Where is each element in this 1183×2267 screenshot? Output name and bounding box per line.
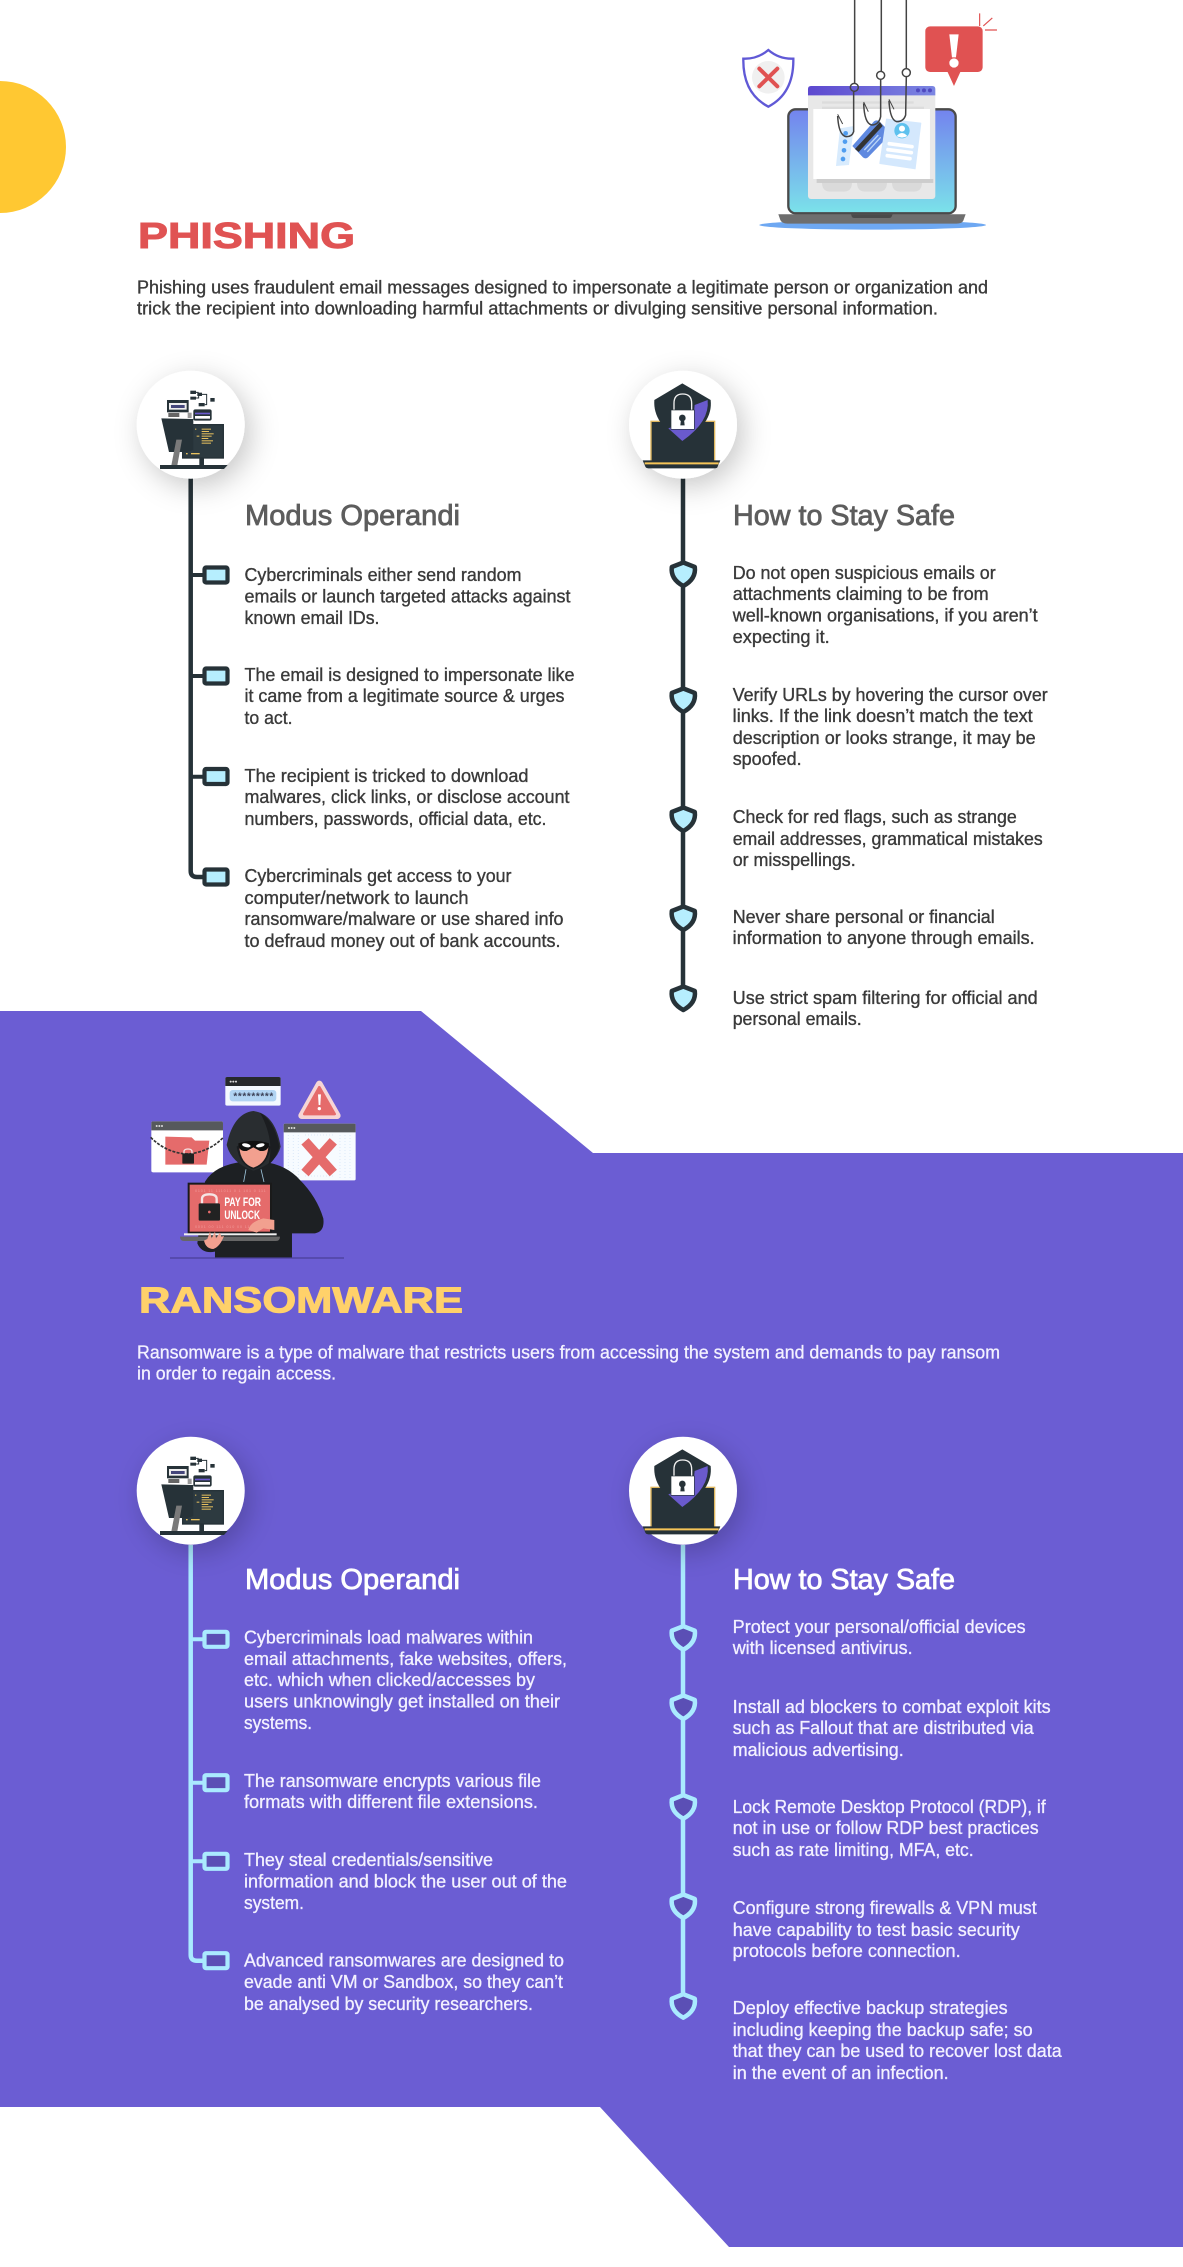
tips: including keeping the backup safe; so <box>733 2020 1033 2040</box>
tips: in the event of an infection. <box>733 2063 949 2083</box>
tips: Configure strong firewalls & VPN must <box>733 1898 1037 1918</box>
tips <box>732 1617 1063 2083</box>
tips: with licensed antivirus. <box>732 1638 913 1658</box>
icon: alert bubble <box>925 13 997 86</box>
phishing description <box>137 278 988 318</box>
tips: that they can be used to recover lost data <box>733 2041 1063 2061</box>
icon circle: shield and laptop <box>629 1437 737 1545</box>
panel: ransomware modus operandi <box>137 1437 567 2014</box>
heading: Modus Operandi <box>245 500 460 532</box>
panel: ransomware how to stay safe <box>629 1437 1063 2083</box>
tips: Protect your personal/official devices <box>733 1617 1026 1637</box>
panel: phishing how to stay safe <box>629 371 1048 1029</box>
laptop with ransom screen <box>180 1183 280 1249</box>
phishing description: Phishing uses fraudulent email messages designed to impersonate a legitimate person or organization and <box>137 278 988 298</box>
title: phishing: PHISHING <box>138 215 355 256</box>
tips: well-known organisations, if you aren’t <box>732 605 1038 625</box>
laptop with ransom screen: 0101 11 111011 0 1 101 0 111 <box>195 1189 266 1193</box>
tips: Check for red flags, such as strange <box>733 807 1017 827</box>
steps: ransomware/malware or use shared info <box>244 909 564 929</box>
tips: not in use or follow RDP best practices <box>733 1818 1039 1838</box>
steps: etc. which when clicked/accesses by <box>244 1670 535 1690</box>
phishing description: trick the recipient into downloading harmful attachments or divulging sensitive personal information. <box>137 298 938 318</box>
tips: have capability to test basic security <box>733 1920 1020 1940</box>
tips: Verify URLs by hovering the cursor over <box>733 685 1048 705</box>
tips: personal emails. <box>733 1009 862 1029</box>
tips: protocols before connection. <box>733 1941 961 1961</box>
ransomware illustration: hooded hacker <box>151 1077 356 1258</box>
steps: to defraud money out of bank accounts. <box>244 931 560 951</box>
tips: Never share personal or financial <box>733 907 995 927</box>
warning triangle <box>302 1084 337 1116</box>
steps: system. <box>244 1893 304 1913</box>
tips: or misspellings. <box>733 850 856 870</box>
steps <box>244 565 574 951</box>
ticks and boxes <box>191 1632 228 1968</box>
steps: Cybercriminals load malwares within <box>244 1628 533 1648</box>
ticks and boxes <box>191 568 228 884</box>
icon circle: hacker desk <box>137 371 245 479</box>
steps: The recipient is tricked to download <box>244 766 528 786</box>
rejected window <box>284 1124 356 1180</box>
heading: Modus Operandi <box>245 1564 460 1596</box>
hacker figure <box>197 1111 324 1258</box>
decorative yellow circle <box>0 81 66 213</box>
steps: Advanced ransomwares are designed to <box>244 1951 564 1971</box>
tips: expecting it. <box>733 627 830 647</box>
timeline <box>681 1545 685 2005</box>
steps: emails or launch targeted attacks against <box>244 587 570 607</box>
locked folder window <box>151 1121 223 1172</box>
ground line <box>170 1256 344 1260</box>
steps: information and block the user out of the <box>244 1872 567 1892</box>
laptop with ransom screen: PAY FOR <box>224 1195 261 1209</box>
icon circle: hacker desk <box>137 1437 245 1545</box>
tips: Lock Remote Desktop Protocol (RDP), if <box>733 1797 1047 1817</box>
timeline <box>191 1545 204 1961</box>
steps: malwares, click links, or disclose account <box>244 787 570 807</box>
steps <box>244 1628 567 2014</box>
laptop with ransom screen: 0001 00 111 010 00 111 1010 <box>195 1225 266 1229</box>
steps: be analysed by security researchers. <box>244 1994 533 2014</box>
tips: information to anyone through emails. <box>733 928 1035 948</box>
steps: email attachments, fake websites, offers, <box>244 1649 567 1669</box>
timeline <box>191 478 204 877</box>
tips: attachments claiming to be from <box>733 584 989 604</box>
tips: spoofed. <box>733 749 802 769</box>
credit card <box>852 120 890 158</box>
id card <box>880 119 921 169</box>
password window <box>225 1077 281 1106</box>
heading: How to Stay Safe <box>733 1564 955 1596</box>
icon circle: shield and laptop <box>629 371 737 479</box>
tips <box>732 563 1048 1029</box>
laptop with ransom screen: UNLOCK <box>224 1208 260 1222</box>
purple ransomware background <box>0 1011 1183 2247</box>
steps: it came from a legitimate source & urges <box>244 686 564 706</box>
title: ransomware: RANSOMWARE <box>139 1280 463 1321</box>
steps: to act. <box>244 708 292 728</box>
steps: formats with different file extensions. <box>244 1792 538 1812</box>
tips: description or looks strange, it may be <box>733 728 1036 748</box>
steps: numbers, passwords, official data, etc. <box>244 809 546 829</box>
timeline <box>681 478 685 998</box>
steps: computer/network to launch <box>244 888 468 908</box>
tips: such as Fallout that are distributed via <box>733 1718 1035 1738</box>
tips: malicious advertising. <box>733 1740 904 1760</box>
fishing lines and hooks <box>838 0 910 137</box>
tips: such as rate limiting, MFA, etc. <box>733 1840 974 1860</box>
steps: evade anti VM or Sandbox, so they can’t <box>244 1972 563 1992</box>
steps: The email is designed to impersonate like <box>244 665 574 685</box>
ransomware description: in order to regain access. <box>137 1364 336 1384</box>
icon: shield with cross <box>743 50 793 107</box>
panel: phishing modus operandi <box>137 371 574 951</box>
shield markers <box>672 1626 695 2018</box>
phishing illustration: laptop and hooks <box>743 0 997 230</box>
steps: users unknowingly get installed on their <box>244 1692 560 1712</box>
steps: Cybercriminals get access to your <box>244 866 512 886</box>
heading: How to Stay Safe <box>733 500 955 532</box>
steps: Cybercriminals either send random <box>244 565 522 585</box>
ransomware description <box>137 1343 1000 1384</box>
steps: The ransomware encrypts various file <box>244 1771 541 1791</box>
tips: Do not open suspicious emails or <box>733 563 996 583</box>
tips: Deploy effective backup strategies <box>733 1998 1008 2018</box>
tips: links. If the link doesn’t match the text <box>733 706 1033 726</box>
shield markers <box>672 562 695 1010</box>
steps: systems. <box>244 1713 312 1733</box>
steps: known email IDs. <box>244 608 380 628</box>
password card <box>836 126 854 166</box>
tips: Install ad blockers to combat exploit kits <box>733 1697 1051 1717</box>
tips: email addresses, grammatical mistakes <box>733 829 1043 849</box>
tips: Use strict spam filtering for official and <box>733 988 1038 1008</box>
password window: ********* <box>233 1092 273 1103</box>
steps: They steal credentials/sensitive <box>244 1850 493 1870</box>
ransomware description: Ransomware is a type of malware that restricts users from accessing the system and demands to pay ransom <box>137 1343 1000 1363</box>
